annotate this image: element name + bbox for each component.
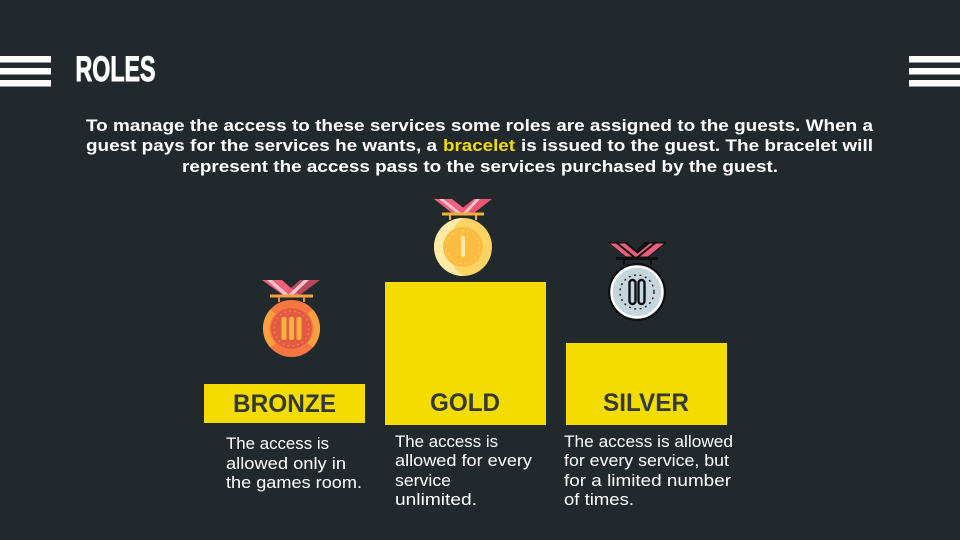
intro text block: To manage the access to these services some roles are assigned to the guests. When a: [86, 116, 874, 135]
text block: silver description: [564, 432, 733, 509]
icon: right stripes: [909, 56, 960, 86]
icon: gold medal: [434, 199, 492, 276]
intro text block: [86, 116, 874, 176]
icon: left stripes: [0, 56, 51, 86]
label: bronze: BRONZE: [233, 390, 336, 418]
text block: bronze description: [226, 434, 362, 492]
text block: gold description: unlimited.: [395, 490, 477, 509]
panel: bronze podium: [204, 384, 365, 423]
text block: gold description: allowed for every: [395, 451, 533, 470]
label: silver: SILVER: [603, 389, 689, 417]
text block: gold description: [395, 432, 533, 509]
text block: silver description: for a limited number: [564, 471, 731, 490]
icon: bronze medal: [262, 280, 320, 357]
panel: gold podium: [385, 282, 546, 425]
label: gold: GOLD: [430, 389, 500, 417]
icon: silver medal: [607, 242, 667, 321]
text block: gold description: service: [395, 471, 451, 490]
panel: silver podium: [566, 343, 727, 425]
text block: gold description: The access is: [395, 432, 498, 451]
intro text block: bracelet: [443, 136, 515, 155]
intro text block: is issued to the guest. The bracelet will: [521, 136, 873, 155]
text block: bronze description: The access is: [226, 434, 329, 453]
title: ROLES: [76, 50, 156, 89]
text block: bronze description: the games room.: [226, 473, 362, 492]
text block: silver description: The access is allowed: [564, 432, 733, 451]
text block: bronze description: allowed only in: [226, 454, 346, 473]
intro text block: represent the access pass to the services purchased by the guest.: [182, 157, 778, 176]
intro text block: guest pays for the services he wants, a: [86, 136, 438, 155]
text block: silver description: of times.: [564, 490, 634, 509]
text block: silver description: for every service, but: [564, 451, 729, 470]
